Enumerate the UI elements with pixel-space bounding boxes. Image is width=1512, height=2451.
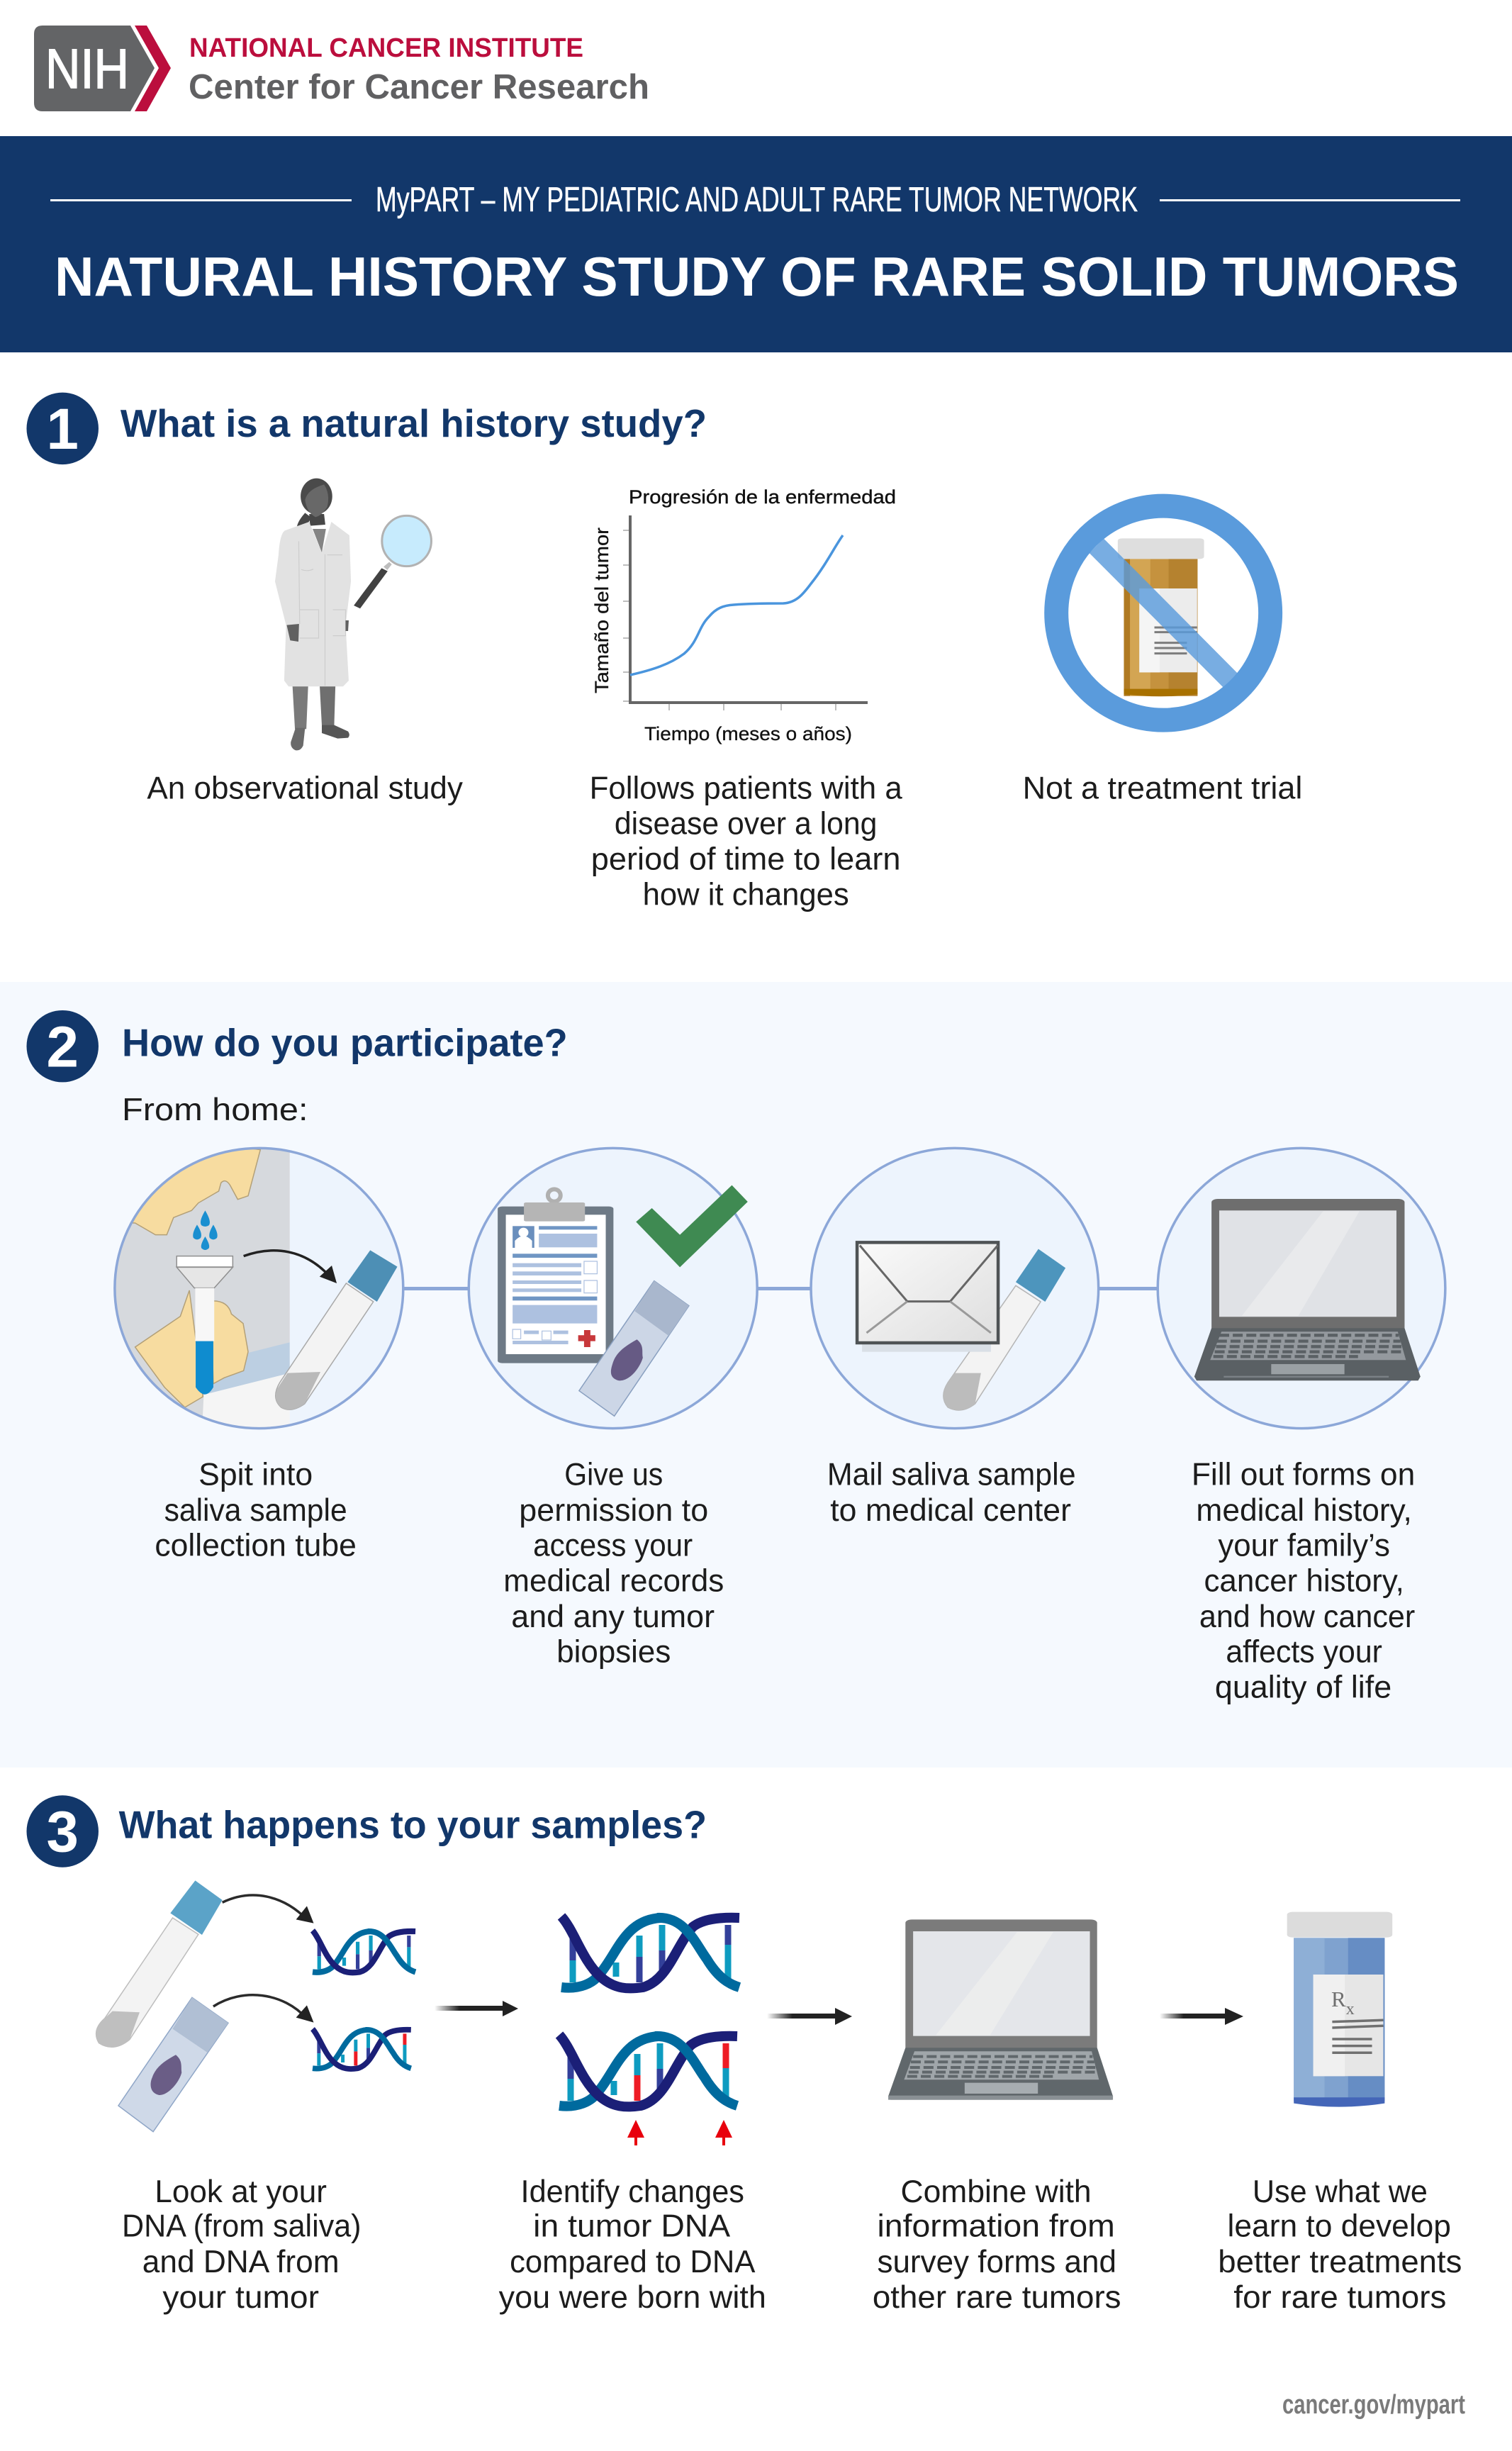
caption: follows patients: disease over a long xyxy=(615,807,877,842)
chart labels: Progresión de la enfermedad xyxy=(629,486,896,508)
step icon: envelope and sample tube xyxy=(811,1148,1099,1429)
icon: saliva tube xyxy=(96,1880,223,2047)
section 3 heading: What happens to your samples? xyxy=(119,1802,707,1846)
arrow: step 2 to step 3 xyxy=(767,2008,852,2025)
caption: fill out forms: Fill out forms on xyxy=(1192,1458,1415,1492)
caption: develop better treatments: better treatments xyxy=(1218,2245,1462,2279)
caption: fill out forms xyxy=(1192,1458,1415,1704)
header banner xyxy=(0,136,1512,352)
icon: researcher with magnifying glass xyxy=(275,479,431,750)
section 3 number badge xyxy=(26,1795,99,1867)
caption: look at your DNA: Look at your xyxy=(155,2174,327,2209)
caption: fill out forms: medical history, xyxy=(1196,1493,1412,1528)
icon: laptop with combined data xyxy=(888,1919,1113,2100)
caption: spit into tube: collection tube xyxy=(155,1528,357,1563)
caption: give permission xyxy=(503,1458,724,1669)
section 1 heading: What is a natural history study? xyxy=(121,401,707,445)
caption: combine information: Combine with xyxy=(901,2174,1092,2209)
caption: combine information: other rare tumors xyxy=(873,2280,1121,2315)
line chart: disease progression: Tamaño del tumor xyxy=(591,527,612,693)
subtitle: MyPART – MY PEDIATRIC AND ADULT RARE TUMOR NETWORK xyxy=(376,181,1138,219)
logo text: NATIONAL CANCER INSTITUTE xyxy=(189,33,583,63)
caption: spit into tube: Spit into xyxy=(198,1458,313,1492)
icon: NIH badge: NIH xyxy=(45,37,129,100)
step icon: spit into collection tube xyxy=(113,1147,404,1429)
caption: mail sample: Mail saliva sample xyxy=(827,1458,1076,1492)
caption: develop better treatments: Use what we xyxy=(1253,2174,1428,2209)
caption: combine information: survey forms and xyxy=(877,2245,1116,2279)
icon: no-medication symbol over orange pill bottle xyxy=(1056,506,1270,720)
section 2 background panel xyxy=(0,982,1512,1768)
caption: follows patients xyxy=(590,771,902,912)
caption: look at your DNA: DNA (from saliva) xyxy=(122,2209,362,2243)
caption: identify changes: in tumor DNA xyxy=(533,2209,731,2243)
caption: develop better treatments: learn to develop xyxy=(1228,2209,1451,2243)
title: NATURAL HISTORY STUDY OF RARE SOLID TUMORS xyxy=(55,245,1459,308)
icon: large mutated DNA xyxy=(559,2035,737,2106)
arrow: step 3 to step 4 xyxy=(1160,2008,1243,2025)
section 2 number badge xyxy=(26,1010,99,1082)
caption: observational study: An observational study xyxy=(147,771,463,805)
caption: give permission: and any tumor xyxy=(511,1599,715,1634)
caption: develop better treatments xyxy=(1218,2174,1462,2315)
icon: NIH badge xyxy=(34,26,171,111)
caption: look at your DNA xyxy=(122,2174,362,2315)
caption: not a treatment trial: Not a treatment trial xyxy=(1023,771,1302,805)
caption: combine information: information from xyxy=(877,2209,1115,2243)
caption: give permission: permission to xyxy=(519,1493,708,1528)
red arrows marking mutations xyxy=(627,2120,732,2145)
chart axes and ticks xyxy=(623,530,836,710)
logo text: Center for Cancer Research xyxy=(189,68,649,106)
section 1 number badge xyxy=(26,393,99,464)
icon: blue pill bottle xyxy=(1287,1912,1392,2107)
icon: blue pill bottle: R xyxy=(1331,1987,1346,2011)
caption: follows patients: how it changes xyxy=(643,877,849,912)
caption: fill out forms: affects your xyxy=(1226,1634,1382,1669)
caption: give permission: medical records xyxy=(503,1563,724,1598)
section 2 number badge: 2 xyxy=(47,1015,79,1079)
caption: combine information xyxy=(873,2174,1121,2315)
caption: fill out forms: quality of life xyxy=(1215,1670,1391,1704)
caption: identify changes: Identify changes xyxy=(521,2174,744,2209)
caption: spit into tube: saliva sample xyxy=(164,1493,347,1528)
section 3 number badge: 3 xyxy=(47,1800,79,1865)
caption: fill out forms: cancer history, xyxy=(1204,1563,1404,1598)
caption: follows patients: period of time to learn xyxy=(591,842,901,876)
line chart: disease progression: Tiempo (meses o años) xyxy=(644,723,852,744)
caption: spit into tube xyxy=(155,1458,357,1563)
caption: fill out forms: your family’s xyxy=(1218,1528,1390,1563)
caption: identify changes: compared to DNA xyxy=(510,2245,756,2279)
caption: give permission: biopsies xyxy=(556,1634,671,1669)
step icon: clipboard, check mark and tissue slide xyxy=(469,1148,757,1429)
caption: look at your DNA: and DNA from xyxy=(142,2245,340,2279)
caption: follows patients: Follows patients with a xyxy=(590,771,902,805)
from home label: From home: xyxy=(122,1093,308,1127)
caption: give permission: access your xyxy=(533,1528,693,1563)
icon: tissue slide xyxy=(579,1281,689,1416)
clipboard xyxy=(498,1189,613,1363)
curved arrows to DNA xyxy=(213,1895,313,2023)
chart curve xyxy=(630,535,843,675)
section 1 number badge: 1 xyxy=(47,397,79,462)
icon: small DNA from saliva xyxy=(313,1931,415,1972)
logo text xyxy=(189,33,649,106)
icon: small DNA from tumor xyxy=(313,2029,411,2069)
caption: give permission: Give us xyxy=(564,1458,663,1492)
logo: NIH National Cancer Institute xyxy=(34,26,649,111)
step icon: laptop xyxy=(1158,1148,1445,1429)
icon: tumor slide xyxy=(118,1997,228,2132)
caption: identify changes: you were born with xyxy=(499,2280,766,2315)
icon: blue pill bottle: x xyxy=(1346,2000,1355,2019)
line chart: disease progression xyxy=(591,486,896,744)
icon: green check xyxy=(636,1185,748,1267)
caption: fill out forms: and how cancer xyxy=(1199,1599,1415,1634)
caption: mail sample xyxy=(827,1458,1076,1528)
caption: identify changes xyxy=(499,2174,766,2315)
caption: mail sample: to medical center xyxy=(830,1493,1071,1528)
arrow: step 1 to step 2 xyxy=(435,2001,518,2016)
caption: develop better treatments: for rare tumors xyxy=(1233,2280,1446,2315)
icon: large normal DNA xyxy=(561,1916,739,1988)
caption: look at your DNA: your tumor xyxy=(162,2280,319,2315)
section 2 heading: How do you participate? xyxy=(122,1021,568,1065)
connector lines between steps xyxy=(403,1287,1158,1290)
